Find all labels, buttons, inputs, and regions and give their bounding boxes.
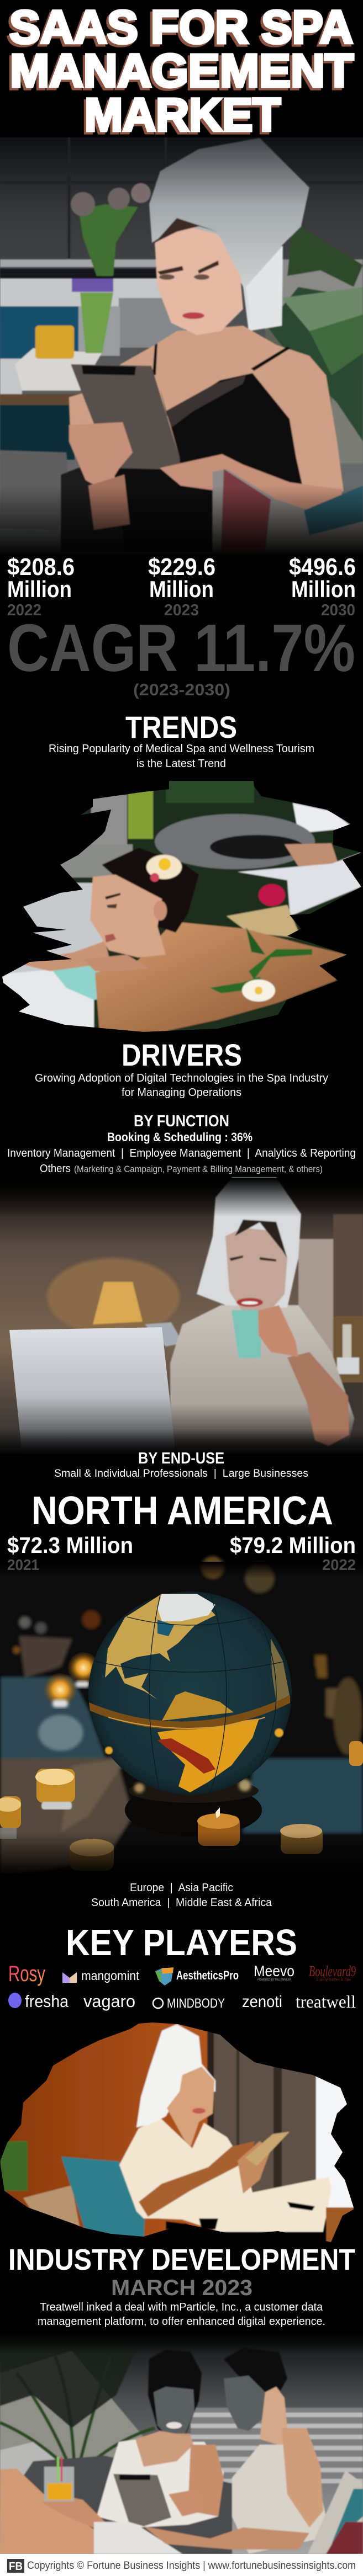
title [9,1,354,141]
stat 2023: Million [149,576,214,602]
stat: North America 2022: $79.2 Million [230,1532,356,1558]
segment: by function: Inventory Management | Employee Management | Analytics & Reporting [7,1147,356,1159]
segment: by function: Booking & Scheduling : 36% [107,1130,252,1144]
segment: by end-use: Small & Individual Professionals | Large Businesses [54,1468,308,1479]
front candles [197,1807,323,1854]
segment: by function [7,1113,356,1175]
photo: woman at spa massage [0,778,363,1037]
stat 2022 [7,553,75,619]
development description [38,2301,325,2328]
footer bar [0,2554,363,2576]
table and blurred background [0,1556,363,1882]
globe [88,1592,292,1795]
logo: treatwell: treatwell [296,1992,356,2011]
trends description: Rising Popularity of Medical Spa and Wellness Tourism [49,743,314,755]
drivers description: Growing Adoption of Digital Technologies in the Spa Industry [35,1072,329,1084]
region heading: North America: NORTH AMERICA [31,1489,333,1533]
logo: zenoti: zenoti [242,1993,282,2011]
logo: fresha [8,1992,69,2011]
title: MANAGEMENT [10,45,354,97]
logo: AestheticsPro [155,1967,239,1986]
stat: North America 2021: $72.3 Million [7,1532,133,1558]
date: March 2023: MARCH 2023 [111,2276,252,2300]
stat 2030: 2030 [321,602,355,619]
candles [0,1652,363,1871]
photo: two women with face masks and tablet [0,2332,363,2554]
logo: fresha: fresha [25,1992,69,2011]
segment: by function: BY FUNCTION [134,1113,229,1130]
segment: by end-use [54,1450,308,1479]
logo: Mindbody [153,1996,225,2011]
segment: by function: Others [40,1163,71,1175]
logo: mangomint: mangomint [81,1968,140,1983]
list of other regions: Europe | Asia Pacific [130,1882,233,1894]
trends description [49,743,314,770]
stat: North America 2022 [230,1532,356,1573]
list of other regions [91,1882,272,1909]
logo: Rosy: Rosy [8,1962,45,1986]
stat 2030: Million [291,576,356,602]
stat 2023 [148,553,215,619]
stat 2023: 2023 [164,602,199,619]
heading: trends: TRENDS [125,710,237,744]
logo: vagaro: vagaro [83,1992,135,2011]
development description: management platform, to offer enhanced digital experience. [38,2316,325,2328]
photo: globe with candles [0,1556,363,1896]
photo: woman in towel with tablet [0,137,363,560]
segment: by function: (Marketing & Campaign, Payment & Billing Management, & others) [74,1164,323,1174]
stat 2030 [289,553,356,619]
drivers description: for Managing Operations [122,1086,241,1099]
drivers description [35,1072,329,1099]
stat 2022: Million [7,576,72,602]
logo: Meevo: POWERED BY MILLENNIUM [257,1978,291,1982]
development description: Treatwell inked a deal with mParticle, Inc., a customer data [40,2301,323,2313]
stat: North America 2021: 2021 [7,1556,39,1573]
logo: AestheticsPro: AestheticsPro [176,1968,239,1982]
company logos [8,1962,356,2011]
stat 2023: $229.6 [148,553,215,581]
stat 2030: $496.6 [289,553,356,581]
stat: North America 2022: 2022 [322,1556,356,1573]
photo: woman with face mask, laptop and mug [0,1178,363,1457]
segment: by end-use: BY END-USE [138,1450,224,1467]
logo: Meevo: Meevo [254,1962,294,1979]
photo: woman in bathrobe with tablet [0,2020,355,2252]
stat 2022: $208.6 [7,553,75,581]
CAGR figure: (2023-2030) [133,681,230,699]
Fortune Business Insights logo: FB [9,2561,23,2573]
stat: North America 2021 [7,1532,133,1573]
globe base [125,1779,262,1837]
title: SAAS FOR SPA [9,1,353,53]
heading: drivers: DRIVERS [122,1037,242,1072]
title: MARKET [85,89,281,141]
trends description: is the Latest Trend [136,758,226,770]
list of other regions: South America | Middle East & Africa [91,1897,272,1909]
market size stats [7,553,356,619]
logo: Mindbody: MINDBODY [167,1996,225,2011]
heading: key players: KEY PLAYERS [66,1922,297,1963]
stat 2022: 2022 [7,602,41,619]
logo: Boulevard 9: Luxury Barber & Spa [317,1978,351,1982]
